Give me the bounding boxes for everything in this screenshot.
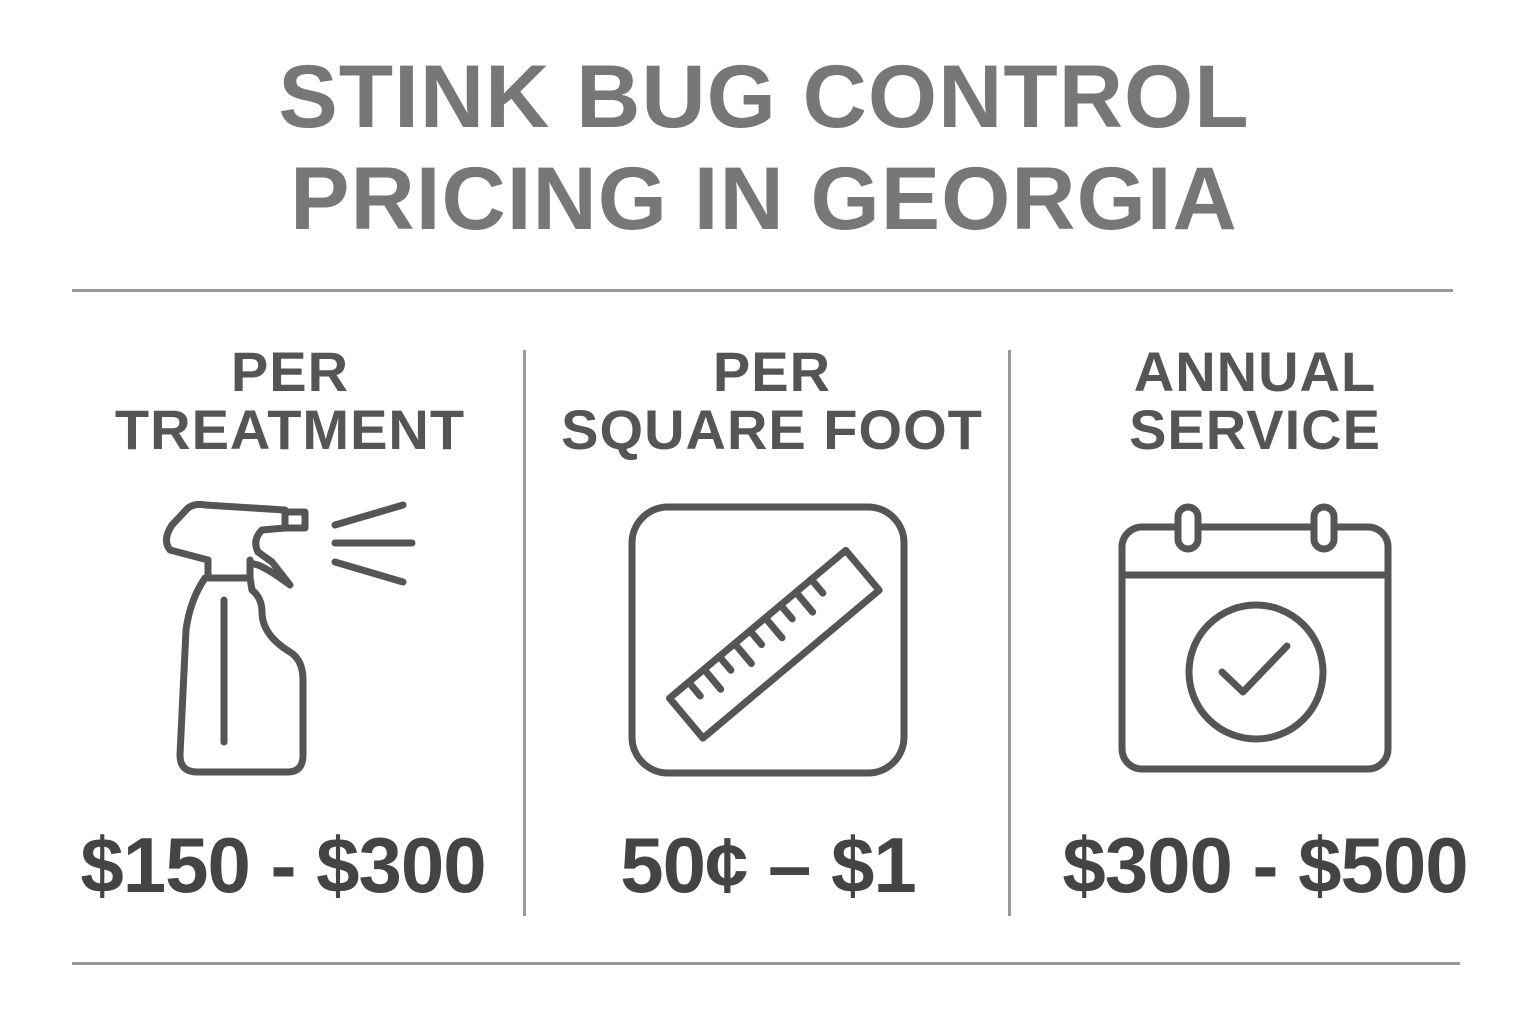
title: PRICING IN GEORGIA <box>290 148 1238 248</box>
heading: per square foot <box>561 340 983 461</box>
heading: annual service: ANNUAL <box>1134 340 1376 403</box>
heading: annual service: SERVICE <box>1129 398 1381 461</box>
heading: per square foot: SQUARE FOOT <box>561 398 983 461</box>
price: per treatment: $150 - $300 <box>80 821 486 909</box>
heading: per square foot: PER <box>713 340 831 403</box>
price: annual service: $300 - $500 <box>1062 821 1468 909</box>
heading: annual service <box>1129 340 1381 461</box>
icon: calendar with check <box>1118 504 1392 772</box>
icon: ruler in square <box>628 504 908 776</box>
price: per square foot: 50¢ – $1 <box>620 821 916 909</box>
heading: per treatment: PER <box>231 340 349 403</box>
heading: per treatment <box>115 340 465 461</box>
icon: spray bottle <box>162 500 416 776</box>
heading: per treatment: TREATMENT <box>115 398 465 461</box>
title <box>278 46 1250 248</box>
title: STINK BUG CONTROL <box>278 46 1250 146</box>
